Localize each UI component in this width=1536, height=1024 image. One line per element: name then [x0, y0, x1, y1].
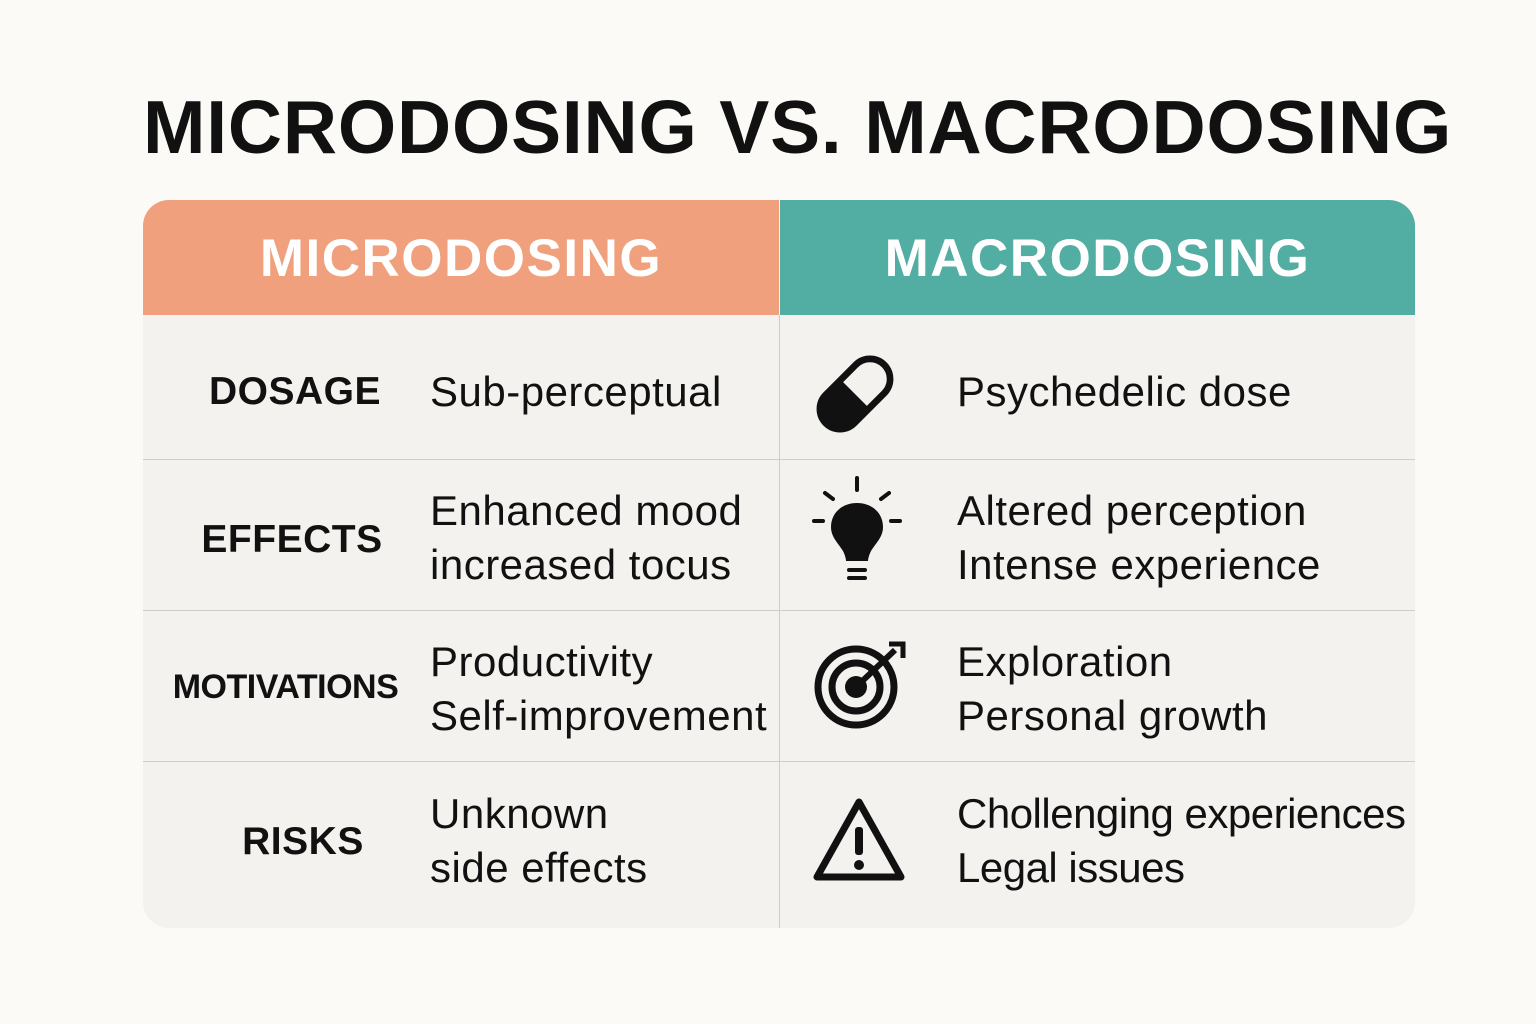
effects micro: Enhanced mood — [430, 487, 742, 534]
effects macro — [957, 487, 1321, 588]
motivations micro — [430, 638, 767, 739]
row label: effects: EFFECTS — [201, 518, 383, 561]
effects macro: Altered perception — [957, 487, 1307, 534]
risks macro: Legal issues — [957, 844, 1184, 891]
header: microdosing: MICRODOSING — [260, 229, 662, 288]
dosage micro: Sub-perceptual — [430, 368, 722, 415]
icon: pill — [816, 356, 894, 432]
table — [143, 200, 1415, 928]
dosage macro: Psychedelic dose — [957, 368, 1292, 415]
motivations micro: Self-improvement — [430, 692, 767, 739]
icon: target — [814, 642, 906, 728]
effects macro: Intense experience — [957, 541, 1321, 588]
effects micro: increased tocus — [430, 541, 732, 588]
risks micro: side effects — [430, 844, 648, 891]
header: macrodosing — [780, 200, 1415, 315]
risks micro — [430, 790, 648, 891]
row label: dosage: DOSAGE — [209, 370, 381, 413]
risks macro — [957, 790, 1405, 891]
title: MICRODOSING VS. MACRODOSING — [143, 85, 1452, 169]
motivations macro: Exploration — [957, 638, 1173, 685]
icon: warning — [814, 798, 904, 880]
risks macro: Chollenging experiences — [957, 790, 1405, 837]
row label: motivations: MOTIVATIONS — [173, 668, 398, 706]
row label: risks: RISKS — [242, 820, 364, 863]
motivations micro: Productivity — [430, 638, 653, 685]
risks micro: Unknown — [430, 790, 609, 837]
motivations macro — [957, 638, 1268, 739]
icon: lightbulb — [812, 476, 902, 580]
header: microdosing — [143, 200, 779, 315]
effects micro — [430, 487, 742, 588]
motivations macro: Personal growth — [957, 692, 1268, 739]
header: macrodosing: MACRODOSING — [885, 229, 1310, 288]
